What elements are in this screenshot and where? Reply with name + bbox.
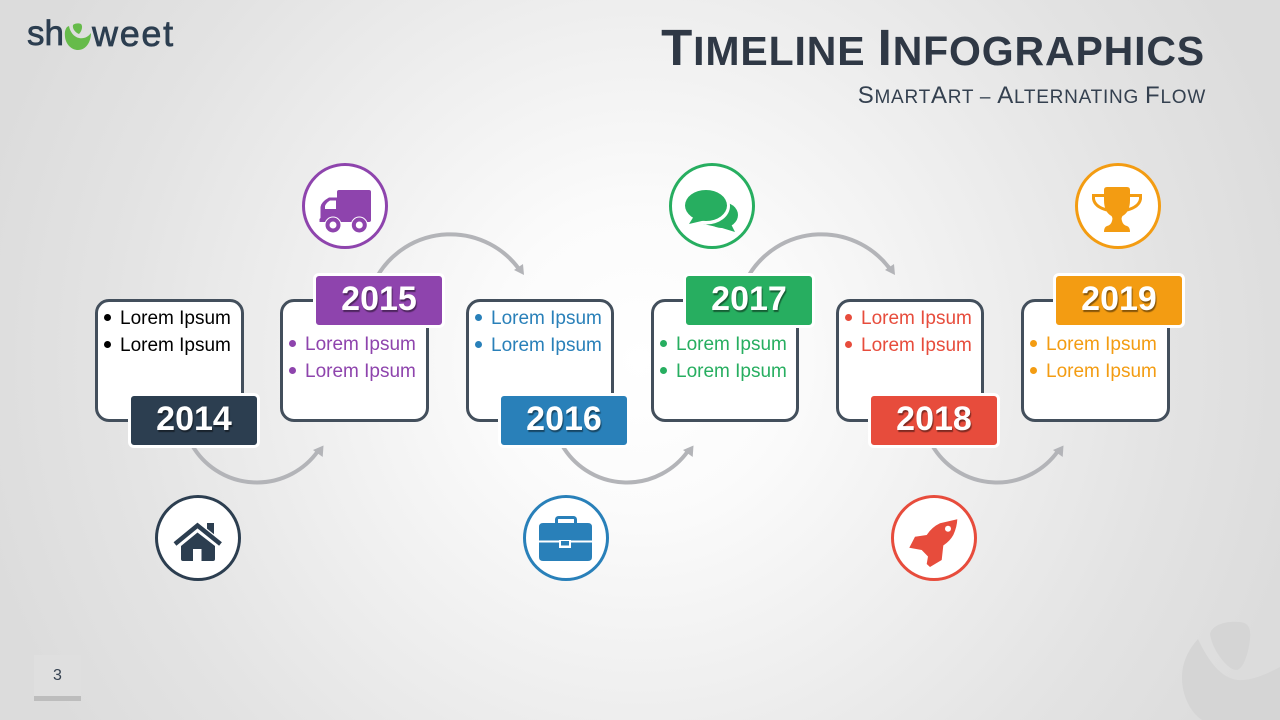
icon: trophy [1076, 164, 1160, 248]
logo: showeet: weet [92, 13, 175, 54]
text: 2017 bullets: Lorem Ipsum [676, 334, 787, 355]
text: 2016 bullets: Lorem Ipsum [491, 335, 602, 356]
year tag: 2015 [313, 273, 445, 328]
text: 2018 bullets: Lorem Ipsum [861, 335, 972, 356]
page number: 3 [53, 667, 62, 684]
panel: 2016 [466, 299, 627, 448]
year tag: 2018 [868, 393, 1000, 448]
year tag: 2016 [498, 393, 630, 448]
text: 2016 bullets [475, 308, 602, 356]
panel: 2015 [280, 273, 444, 422]
panel: 2018 [836, 299, 1000, 448]
logo: showeet: sh [27, 14, 64, 53]
text: 2019 bullets: Lorem Ipsum [1046, 334, 1157, 355]
icon: briefcase [524, 496, 608, 580]
page number [34, 655, 81, 701]
text: 2019 bullets [1030, 334, 1157, 382]
text: 2015 bullets [289, 334, 416, 382]
text: 2015 bullets: Lorem Ipsum [305, 334, 416, 355]
year tag: 2019 [1053, 273, 1185, 328]
logo: showeet [27, 13, 175, 54]
text: 2014 bullets: Lorem Ipsum [120, 335, 231, 356]
subtitle: SMARTART – ALTERNATING FLOW [858, 82, 1206, 109]
year tag: 2017 [683, 273, 815, 328]
title: TIMELINE INFOGRAPHICS [661, 19, 1205, 76]
year tag: 2017: 2017 [711, 280, 787, 318]
icon: speech bubbles [670, 164, 754, 248]
year tag: 2014 [128, 393, 260, 448]
text: 2015 bullets: Lorem Ipsum [305, 361, 416, 382]
icon: truck [304, 164, 386, 248]
panel: 2019 [1021, 273, 1185, 422]
icon: house [156, 496, 240, 580]
year tag: 2014: 2014 [156, 400, 232, 438]
year tag: 2018: 2018 [896, 400, 972, 438]
text: 2014 bullets: Lorem Ipsum [120, 308, 231, 329]
panel: 2017 [651, 273, 812, 422]
text: 2018 bullets: Lorem Ipsum [861, 308, 972, 329]
text: 2018 bullets [845, 308, 972, 356]
panel: 2014 [95, 299, 260, 448]
text: 2014 bullets [104, 308, 231, 356]
text: 2017 bullets: Lorem Ipsum [676, 361, 787, 382]
year tag: 2015: 2015 [341, 280, 417, 318]
text: 2019 bullets: Lorem Ipsum [1046, 361, 1157, 382]
year tag: 2019: 2019 [1081, 280, 1157, 318]
text: 2017 bullets [660, 334, 787, 382]
year tag: 2016: 2016 [526, 400, 602, 438]
icon: rocket [892, 496, 976, 580]
text: 2016 bullets: Lorem Ipsum [491, 308, 602, 329]
